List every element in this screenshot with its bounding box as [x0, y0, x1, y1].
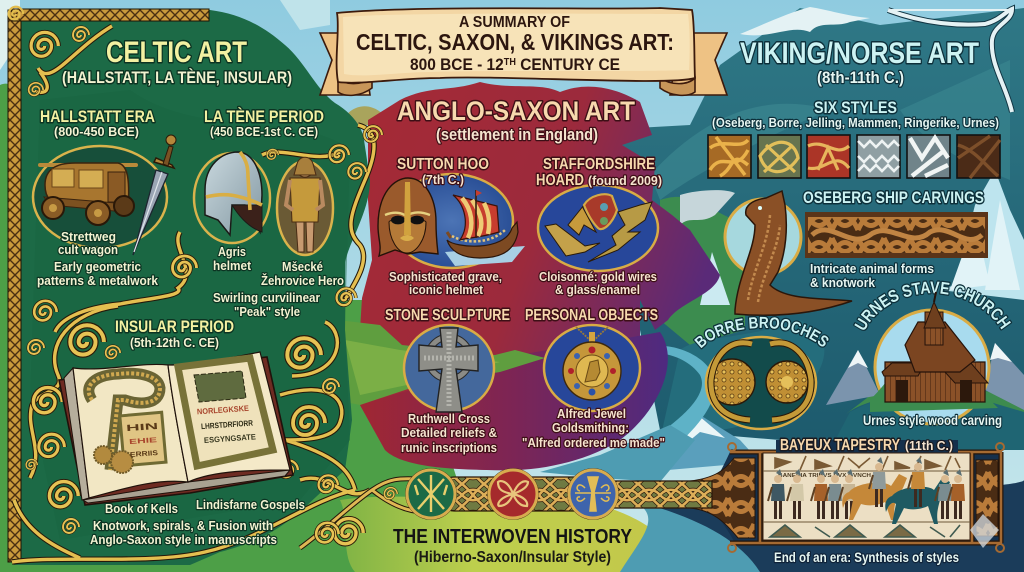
heading: La Tene period: LA TÈNE PERIOD: [204, 107, 324, 126]
icon: Msecke Zehrovice Hero: [277, 157, 333, 255]
medallion: Celtic green: [406, 469, 456, 519]
caption: Alfred Jewel: "Alfred ordered me made": [522, 435, 665, 450]
swatch: Ringerike: [907, 135, 950, 178]
heading: Sutton Hoo: SUTTON HOO: [397, 156, 489, 173]
heading: Bayeux Tapestry: (11th C.): [905, 438, 953, 453]
knotwork band: [300, 477, 712, 548]
caption: Oseberg: & knotwork: [810, 275, 876, 290]
caption: Sutton Hoo: Sophisticated grave,: [389, 269, 502, 284]
caption: La Tene objects: Swirling curvilinear: [213, 290, 320, 305]
caption: Strettweg cult wagon: [37, 229, 159, 288]
title line 2: CELTIC, SAXON, & VIKINGS ART:: [356, 29, 674, 55]
heading: Viking/Norse Art: VIKING/NORSE ART: [740, 37, 979, 70]
caption: La Tene objects: Mšecké: [282, 259, 323, 274]
caption: Bayeux: End of an era: Synthesis of styles: [774, 549, 959, 565]
panel: Anglo-Saxon land: [335, 82, 720, 470]
medallion: Saxon red: [488, 469, 538, 519]
subheading: Celtic periods: (HALLSTATT, LA TÈNE, INSULAR): [62, 68, 292, 87]
caption: Ruthwell Cross: Ruthwell Cross: [408, 411, 490, 426]
caption: Staffordshire Hoard: Cloisonné: gold wires: [539, 269, 657, 284]
icon: open manuscript book: LHRSTDRFIORR: [201, 419, 253, 431]
panel: Anglo-Saxon art: [378, 96, 665, 455]
icon: open manuscript book: HIN: [126, 421, 158, 433]
subheading: settlement: (settlement in England): [436, 125, 598, 144]
panel: Interwoven history band: [300, 469, 712, 566]
swatch: Oseberg: [708, 135, 751, 178]
heading: La Tene period: [204, 107, 324, 139]
heading: Sutton Hoo: [397, 156, 489, 187]
heading: Sutton Hoo: (7th C.): [422, 172, 464, 187]
heading: Staffordshire Hoard: [536, 156, 662, 189]
subheading: Hiberno-Saxon: (Hiberno-Saxon/Insular Style): [414, 549, 611, 566]
caption: Oseberg: Intricate animal forms: [810, 261, 934, 276]
title line 1: A SUMMARY OF: [459, 14, 570, 31]
caption: Staffordshire Hoard: & glass/enamel: [555, 282, 640, 297]
icon: Oseberg ship prow: [725, 191, 852, 315]
icon: Alfred Jewel: [544, 325, 640, 411]
panel: Viking/Norse art: [692, 4, 1015, 430]
medallion: Viking blue: [568, 469, 618, 519]
caption: Staffordshire Hoard: [539, 269, 657, 297]
heading: Borre Brooches: BORRE BROOCHES: [692, 316, 830, 350]
caption: La Tene objects: helmet: [213, 258, 252, 273]
heading: Hallstatt era: HALLSTATT ERA: [40, 107, 155, 126]
swatch: Jelling: [807, 135, 850, 178]
heading: Personal objects: PERSONAL OBJECTS: [525, 307, 658, 324]
carved wood band: [805, 212, 988, 258]
icon: open manuscript book: ERRIIS: [130, 450, 159, 459]
gold vines and spirals: [12, 26, 382, 562]
heading: Six Styles: [712, 98, 999, 130]
heading: Insular period: [115, 317, 234, 350]
icon: Urnes stave church: [870, 292, 998, 424]
caption: Strettweg cult wagon: Strettweg: [61, 229, 116, 244]
heading: Celtic Art: CELTIC ART: [106, 36, 247, 69]
icon: Staffordshire Hoard: [538, 185, 658, 271]
heading: Urnes Stave Church: URNES STAVE CHURCH: [853, 280, 1012, 331]
icon: open manuscript book: ESGYNGSATE: [204, 432, 257, 445]
icon: Sutton Hoo ship: [378, 174, 525, 268]
caption: Insular manuscripts: Anglo-Saxon style in manuscripts: [90, 532, 277, 547]
knotwork corner: [888, 9, 1012, 112]
heading: Staffordshire Hoard: HOARD: [536, 172, 584, 189]
caption: Strettweg cult wagon: Early geometric: [54, 259, 141, 274]
swatch: Borre: [758, 135, 801, 178]
icon: Ruthwell Cross: [404, 325, 494, 412]
icon: open manuscript book: EHIE: [129, 437, 158, 446]
heading: Hallstatt era: [40, 107, 155, 139]
caption: Alfred Jewel: Alfred Jewel: [557, 406, 626, 421]
caption: Insular manuscripts: Knotwork, spirals, & Fusion with: [93, 518, 273, 533]
tapestry scene: BANERIA TRIBVS DVX GVNCH: [778, 473, 871, 479]
caption: Insular manuscripts: Lindisfarne Gospels: [196, 497, 305, 512]
caption: Strettweg cult wagon: patterns & metalwork: [37, 273, 159, 288]
caption: Sutton Hoo: [389, 269, 502, 297]
heading: Hallstatt era: (800-450 BCE): [54, 124, 139, 139]
caption: Insular manuscripts: [90, 497, 305, 547]
title line 3: TH: [504, 57, 516, 68]
caption: Alfred Jewel: [522, 406, 665, 450]
heading: Six Styles: SIX STYLES: [814, 98, 897, 117]
icon: open manuscript book: [59, 352, 293, 505]
heading: The Interwoven History: THE INTERWOVEN HISTORY: [393, 526, 633, 548]
icon: open manuscript book: NORLEGKSKE: [197, 404, 250, 416]
heading: Oseberg ship carvings: OSEBERG SHIP CARVINGS: [803, 188, 984, 207]
caption: Ruthwell Cross: runic inscriptions: [401, 440, 497, 455]
caption: La Tene objects: [213, 244, 344, 319]
caption: La Tene objects: "Peak" style: [234, 304, 300, 319]
swatch: Urnes: [957, 135, 1000, 178]
caption: Strettweg cult wagon: cult wagon: [58, 242, 118, 257]
heading: Staffordshire Hoard: (found 2009): [588, 173, 662, 188]
caption: Ruthwell Cross: [401, 411, 497, 455]
caption: Alfred Jewel: Goldsmithing:: [552, 420, 629, 435]
heading: Anglo-Saxon Art: ANGLO-SAXON ART: [397, 96, 635, 126]
title line 3: CENTURY CE: [516, 55, 620, 74]
heading: Staffordshire Hoard: STAFFORDSHIRE: [543, 156, 655, 173]
caption: Oseberg: [810, 261, 934, 290]
caption: Insular manuscripts: Book of Kells: [105, 501, 178, 516]
title banner: [320, 8, 727, 95]
heading: Bayeux Tapestry: BAYEUX TAPESTRY: [780, 437, 900, 454]
icon: Borre brooches: [706, 337, 816, 429]
caption: Sutton Hoo: iconic helmet: [409, 282, 484, 297]
panel: Celtic land: [8, 7, 382, 565]
icon: sword: [133, 135, 176, 255]
subheading: dates: (8th-11th C.): [817, 68, 904, 87]
caption: La Tene objects: Žehrovice Hero: [261, 273, 344, 288]
heading: La Tene period: (450 BCE-1st C. CE): [210, 124, 318, 139]
caption: Ruthwell Cross: Detailed reliefs &: [401, 425, 497, 440]
heading: Stone sculpture: STONE SCULPTURE: [385, 307, 510, 324]
icon: Agris helmet: [194, 152, 270, 243]
tapestry scene: [763, 453, 970, 540]
icon: Strettweg cult wagon: [33, 146, 167, 248]
title line 3: 800 BCE - 12: [410, 55, 513, 74]
sparkle watermark: [970, 514, 999, 548]
caption: La Tene objects: Agris: [218, 244, 246, 259]
heading: Insular period: (5th-12th C. CE): [130, 335, 219, 350]
heading: Insular period: INSULAR PERIOD: [115, 317, 234, 336]
panel: Bayeux Tapestry: [690, 437, 1004, 565]
knotwork border: [8, 7, 209, 562]
swatch: Mammen: [857, 135, 900, 178]
tapestry frame: [690, 443, 1004, 552]
style swatches: [708, 135, 1000, 178]
